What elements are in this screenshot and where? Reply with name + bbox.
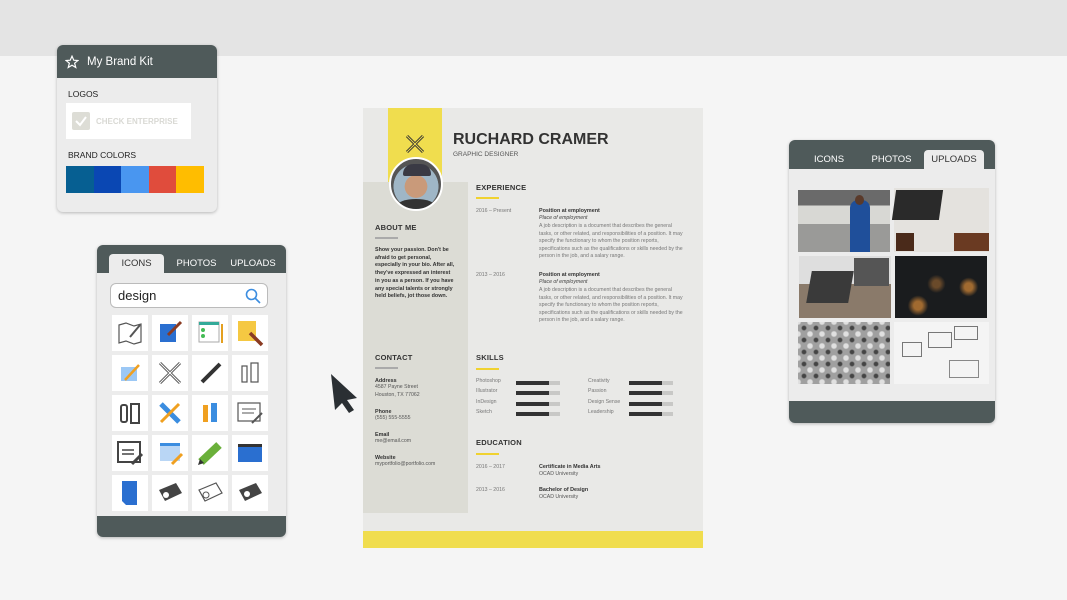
top band <box>0 0 1067 56</box>
experience section <box>476 183 683 323</box>
contact: Email <box>375 432 389 438</box>
contact <box>375 353 435 467</box>
experience section: 2013 – 2016 <box>476 272 505 278</box>
contact: Address <box>375 378 397 384</box>
about me: Show your passion. Don't be afraid to get personal, especially in your bio. After all, they've expressed an interest in you as a person. If you have any special talents or strongly held beliefs, jot those down. <box>375 247 454 299</box>
experience section: EXPERIENCE <box>476 183 526 192</box>
experience section: A job description is a document that describes the general tasks, or other related, and responsibilities of a position. It may specify the functionary to whom the position reports, specifications such as the qualifications or skills needed by the person in the job, and a salary range. <box>539 287 683 323</box>
skills section: Design Sense <box>588 399 620 405</box>
profile photo <box>389 157 443 211</box>
logos label: LOGOS <box>68 89 98 99</box>
education section: Certificate in Media Arts <box>539 464 601 470</box>
resume document <box>363 108 703 548</box>
skills section: Passion <box>588 388 606 394</box>
tabs header <box>97 245 286 273</box>
uploads tabs header: ICONS <box>814 154 844 165</box>
education section: OCAD University <box>539 471 578 477</box>
contact: Houston, TX 77062 <box>375 392 420 398</box>
icon grid <box>112 315 268 511</box>
experience section: 2016 – Present <box>476 208 511 214</box>
photo: laptop desk <box>894 188 989 252</box>
tabs header: ICONS <box>121 258 152 269</box>
contact: (555) 555-5555 <box>375 415 410 421</box>
resume document: myportfolio@portfolio.com <box>375 461 435 467</box>
experience section: Place of employment <box>539 279 587 285</box>
uploads footer <box>789 401 995 423</box>
contact: CONTACT <box>375 353 413 362</box>
contact: Phone <box>375 409 391 415</box>
education section: 2013 – 2016 <box>476 487 505 493</box>
panel: icons search <box>97 245 286 537</box>
contact: Website <box>375 455 396 461</box>
icons panel footer <box>97 516 286 537</box>
skills section: SKILLS <box>476 353 504 362</box>
education section: OCAD University <box>539 494 578 500</box>
uploads tabs header: PHOTOS <box>872 154 911 165</box>
job title: GRAPHIC DESIGNER <box>453 151 518 158</box>
experience section: A job description is a document that describes the general tasks, or other related, and responsibilities of a position. It may specify the functionary to whom the position reports, specifications such as the qualifications or skills needed by the person in the job, and a salary range. <box>539 223 683 259</box>
photo: sequins <box>798 322 890 384</box>
education section <box>476 438 601 500</box>
skills section: Sketch <box>476 409 492 415</box>
education section: Bachelor of Design <box>539 487 588 493</box>
name: RUCHARD CRAMER <box>453 131 609 148</box>
skills section: Photoshop <box>476 378 501 384</box>
photo: wireframe sketch <box>894 322 989 384</box>
logo box <box>66 103 191 139</box>
photo grid <box>798 188 989 384</box>
education section: EDUCATION <box>476 438 522 447</box>
photo: laptop office <box>799 256 891 318</box>
yellow footer bar <box>363 531 703 548</box>
color swatches <box>66 166 204 193</box>
skills section: InDesign <box>476 399 496 405</box>
skills section: Illustrator <box>476 388 497 394</box>
icon: mouse cursor <box>331 374 357 413</box>
about me <box>375 223 454 299</box>
skills section: Leadership <box>588 409 614 415</box>
education section: 2016 – 2017 <box>476 464 505 470</box>
panel: uploads <box>789 140 995 423</box>
photo: bulbs dark <box>895 256 987 318</box>
tabs header: UPLOADS <box>230 258 276 269</box>
uploads tabs header <box>789 140 995 169</box>
search box: design <box>118 288 156 303</box>
contact: me@email.com <box>375 438 411 444</box>
panel: my brand kit <box>57 45 217 212</box>
skills section: Creativity <box>588 378 610 384</box>
uploads tabs header: UPLOADS <box>931 154 977 165</box>
tabs header: PHOTOS <box>177 258 216 269</box>
brand colors label: BRAND COLORS <box>68 150 136 160</box>
brand kit header: My Brand Kit <box>87 56 153 68</box>
brand kit header <box>57 45 217 78</box>
experience section: Position at employment <box>539 208 600 214</box>
yellow header strip <box>388 108 442 182</box>
experience section: Place of employment <box>539 215 587 221</box>
about me: ABOUT ME <box>375 223 417 232</box>
photo: man in suit <box>798 190 890 252</box>
search box <box>110 283 268 308</box>
experience section: Position at employment <box>539 272 600 278</box>
logo box: CHECK ENTERPRISE <box>96 117 178 126</box>
skills section <box>476 353 673 416</box>
left column <box>363 182 468 513</box>
contact: 4587 Payne Street <box>375 384 418 390</box>
